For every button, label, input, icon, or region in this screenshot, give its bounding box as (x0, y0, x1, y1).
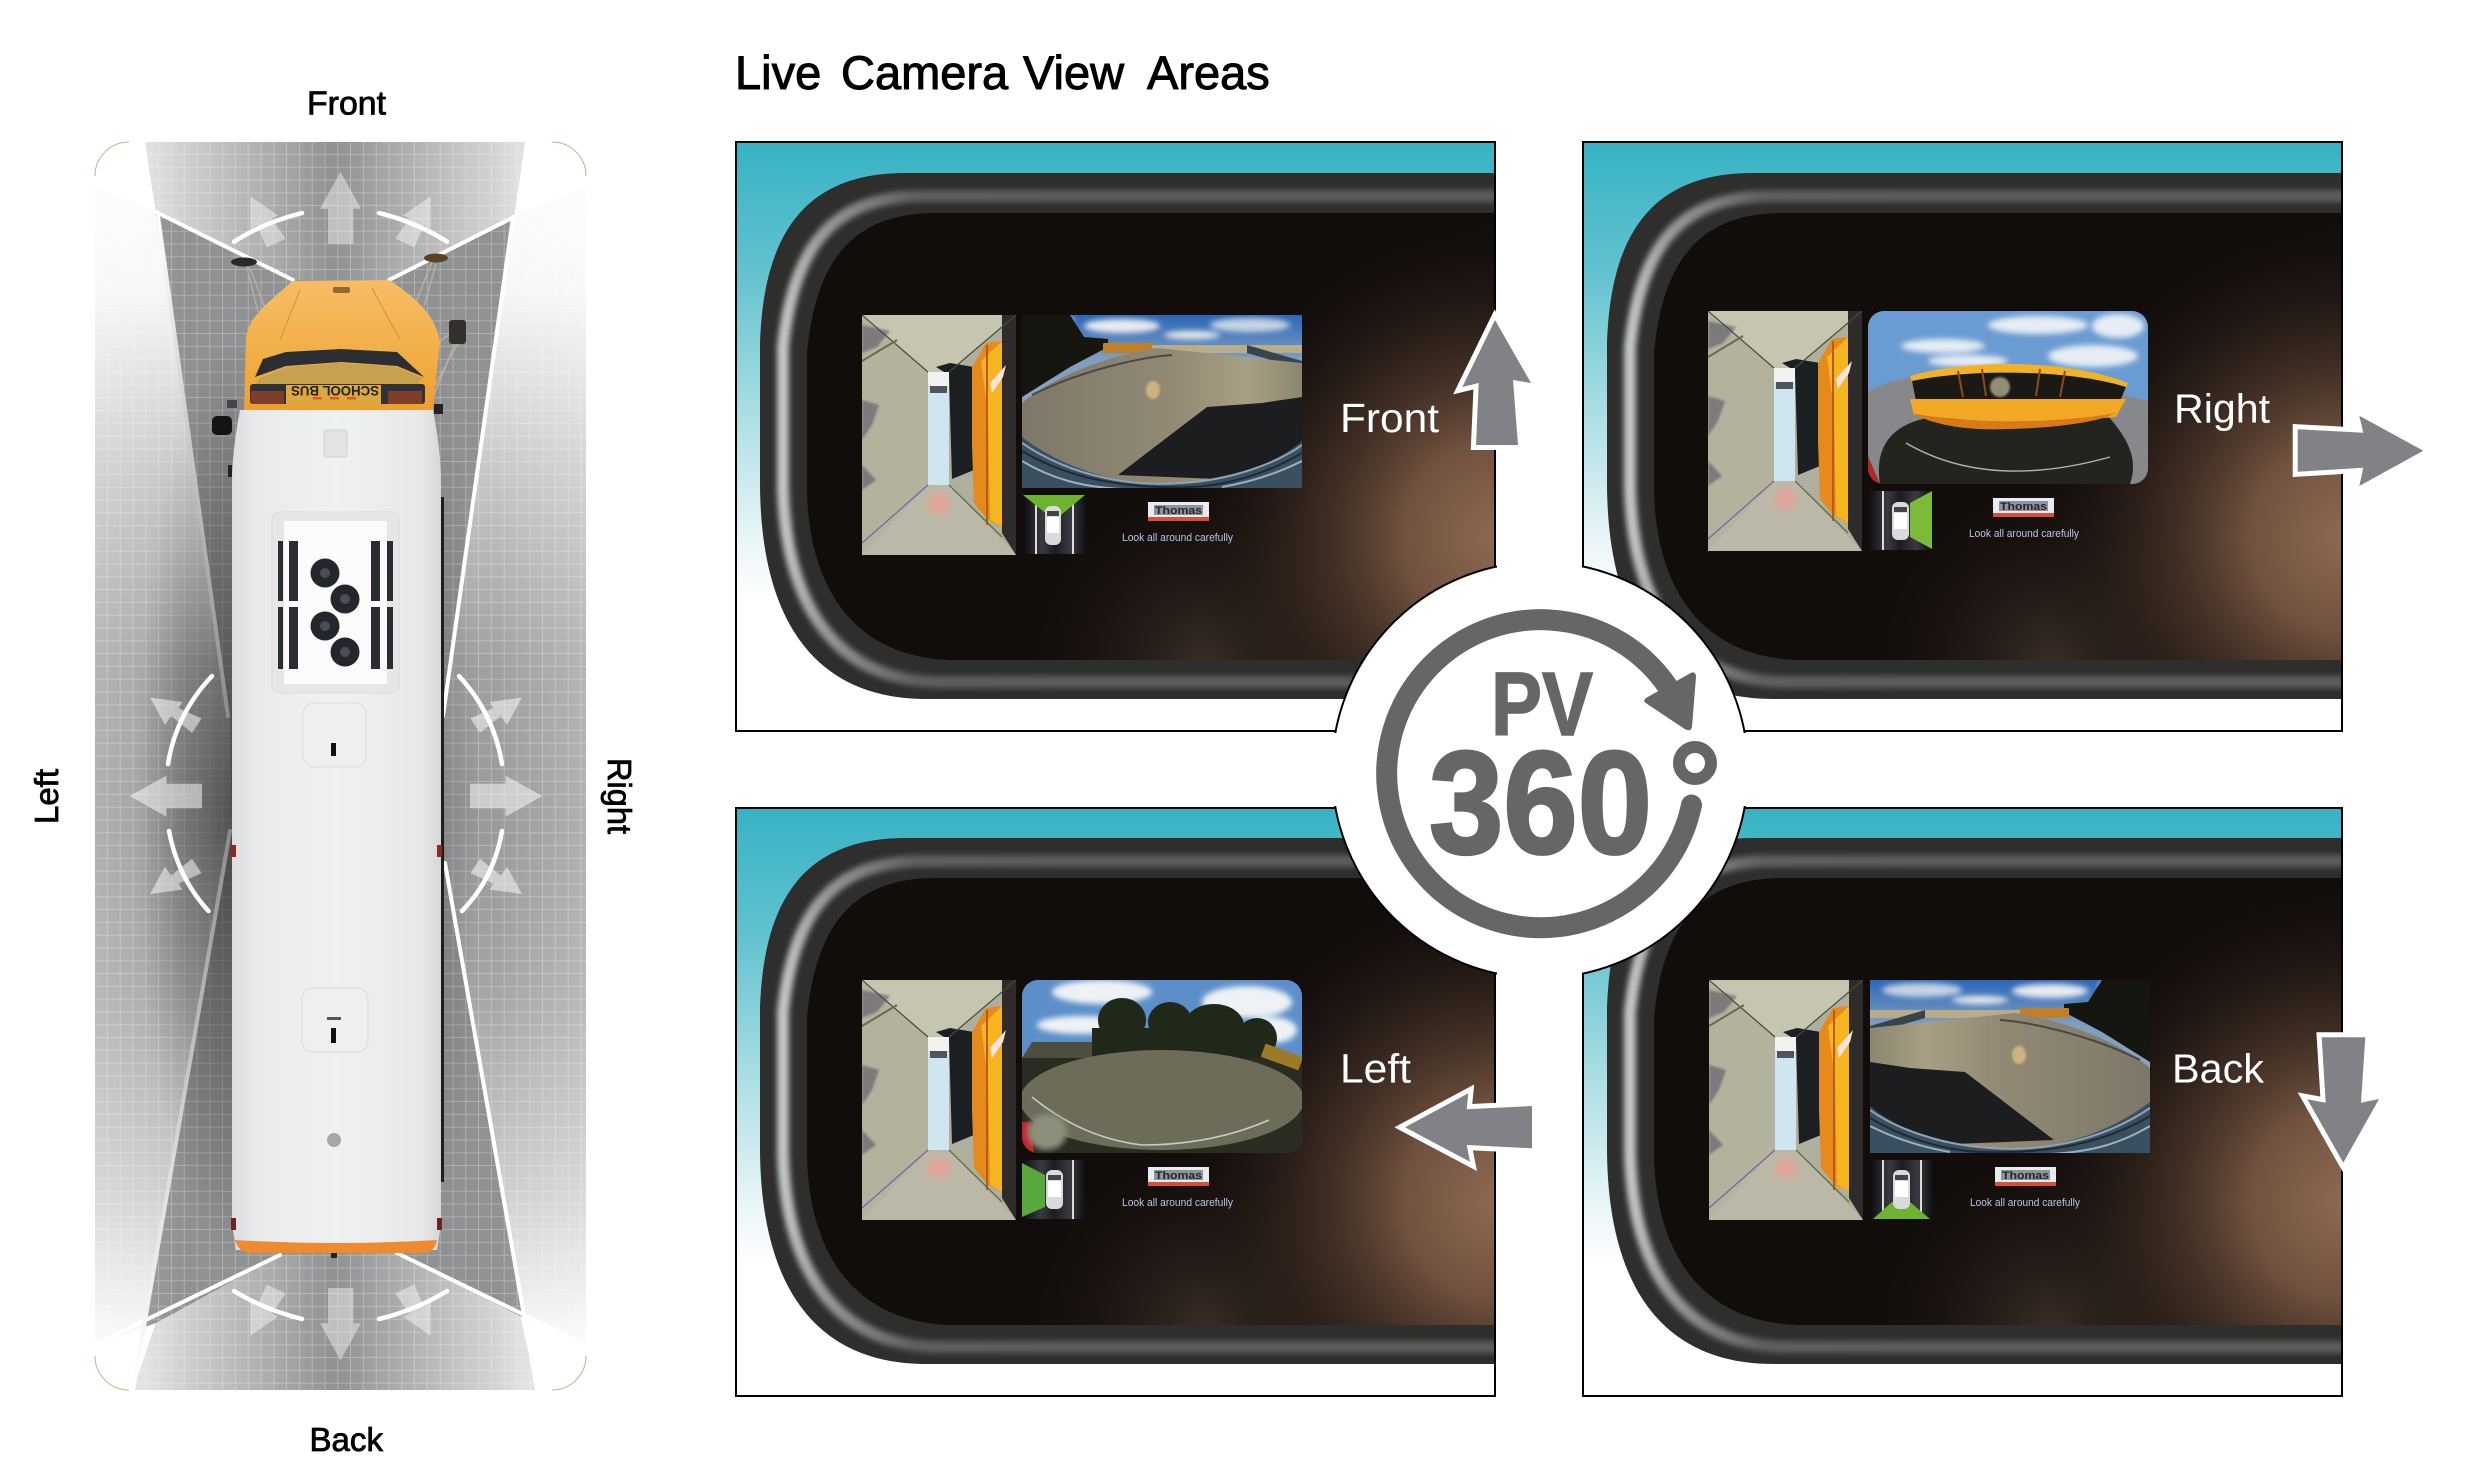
roof (232, 410, 441, 1250)
title: Live (735, 46, 821, 99)
rear orange bumper (235, 1240, 437, 1253)
panel: bus top-view coverage diagram (94, 142, 586, 1390)
rotation ring with arrow (1387, 620, 1695, 928)
degree symbol ring (1679, 747, 1711, 779)
white circle backing (1332, 562, 1748, 978)
side mirrors (212, 254, 466, 1230)
text: PV: PV (1491, 655, 1593, 755)
panel: right camera view (1583, 142, 2383, 732)
SCHOOL BUS lettering: SCHOOL BUS (291, 383, 379, 399)
panel: back camera view (1583, 807, 2383, 1397)
corner hairlines (95, 142, 586, 1390)
screen logo (1148, 1167, 1209, 1186)
roof hatch 2 (302, 988, 368, 1052)
school bus (212, 254, 466, 1258)
screen logo (1995, 1167, 2056, 1186)
body shadow edge (440, 497, 444, 1182)
sweep arcs (168, 213, 502, 1319)
title: Areas (1147, 46, 1270, 99)
grid ground background (95, 142, 586, 1390)
screen message: Look all around carefully (1122, 532, 1233, 544)
screen message: Look all around carefully (1970, 1197, 2080, 1209)
icon: car with back zone highlighted (1870, 1160, 1934, 1219)
cross-shaped white gap (1330, 560, 1750, 980)
roof dome light (327, 1133, 341, 1147)
badge: PV 360 logo (1330, 560, 1750, 980)
windshield (255, 349, 424, 377)
coverage zone boundary lines (94, 212, 586, 1390)
arrow: right (2298, 416, 2423, 486)
icon: car with left zone highlighted (1022, 1160, 1086, 1219)
arrow: left (1405, 1093, 1532, 1162)
fans (310, 558, 360, 666)
label: Left: Left (1340, 1046, 1412, 1092)
camera image: right side with bus (1868, 311, 2148, 484)
label: Left: Left (28, 769, 65, 824)
title: View (1023, 46, 1125, 99)
panel: left camera view (736, 807, 1536, 1397)
arrow: back (2307, 1037, 2379, 1163)
roof hatch 1 (303, 703, 366, 767)
label: Back: Back (2172, 1046, 2264, 1092)
label: Right: Right (601, 758, 638, 834)
screen logo (1148, 502, 1209, 521)
label: Back: Back (310, 1421, 383, 1458)
mirror arms (246, 262, 462, 400)
arrow: front (1462, 320, 1531, 445)
title: Camera (841, 46, 1009, 99)
roof vent (324, 430, 347, 457)
screen message: Look all around carefully (1122, 1197, 1233, 1209)
screen logo (1993, 498, 2054, 517)
text: 360: 360 (1429, 721, 1652, 884)
panel: front camera view (736, 142, 1536, 732)
label: Right: Right (2174, 386, 2271, 432)
camera image: rear view (1870, 980, 2150, 1154)
icon: car with right zone highlighted (1868, 491, 1932, 550)
icon: car with front zone highlighted (1023, 495, 1087, 554)
air conditioning unit (272, 512, 399, 693)
front grille band (250, 384, 425, 404)
camera image: left side with trees (1020, 980, 1304, 1153)
arrows: front views (250, 172, 431, 248)
label: Front: Front (307, 84, 386, 122)
arrows: back views (250, 1284, 431, 1360)
arrows: left views (130, 698, 202, 894)
arrows: right views (470, 698, 542, 894)
hood (244, 280, 440, 410)
label: Front: Front (1340, 395, 1440, 441)
screen message: Look all around carefully (1969, 528, 2079, 540)
